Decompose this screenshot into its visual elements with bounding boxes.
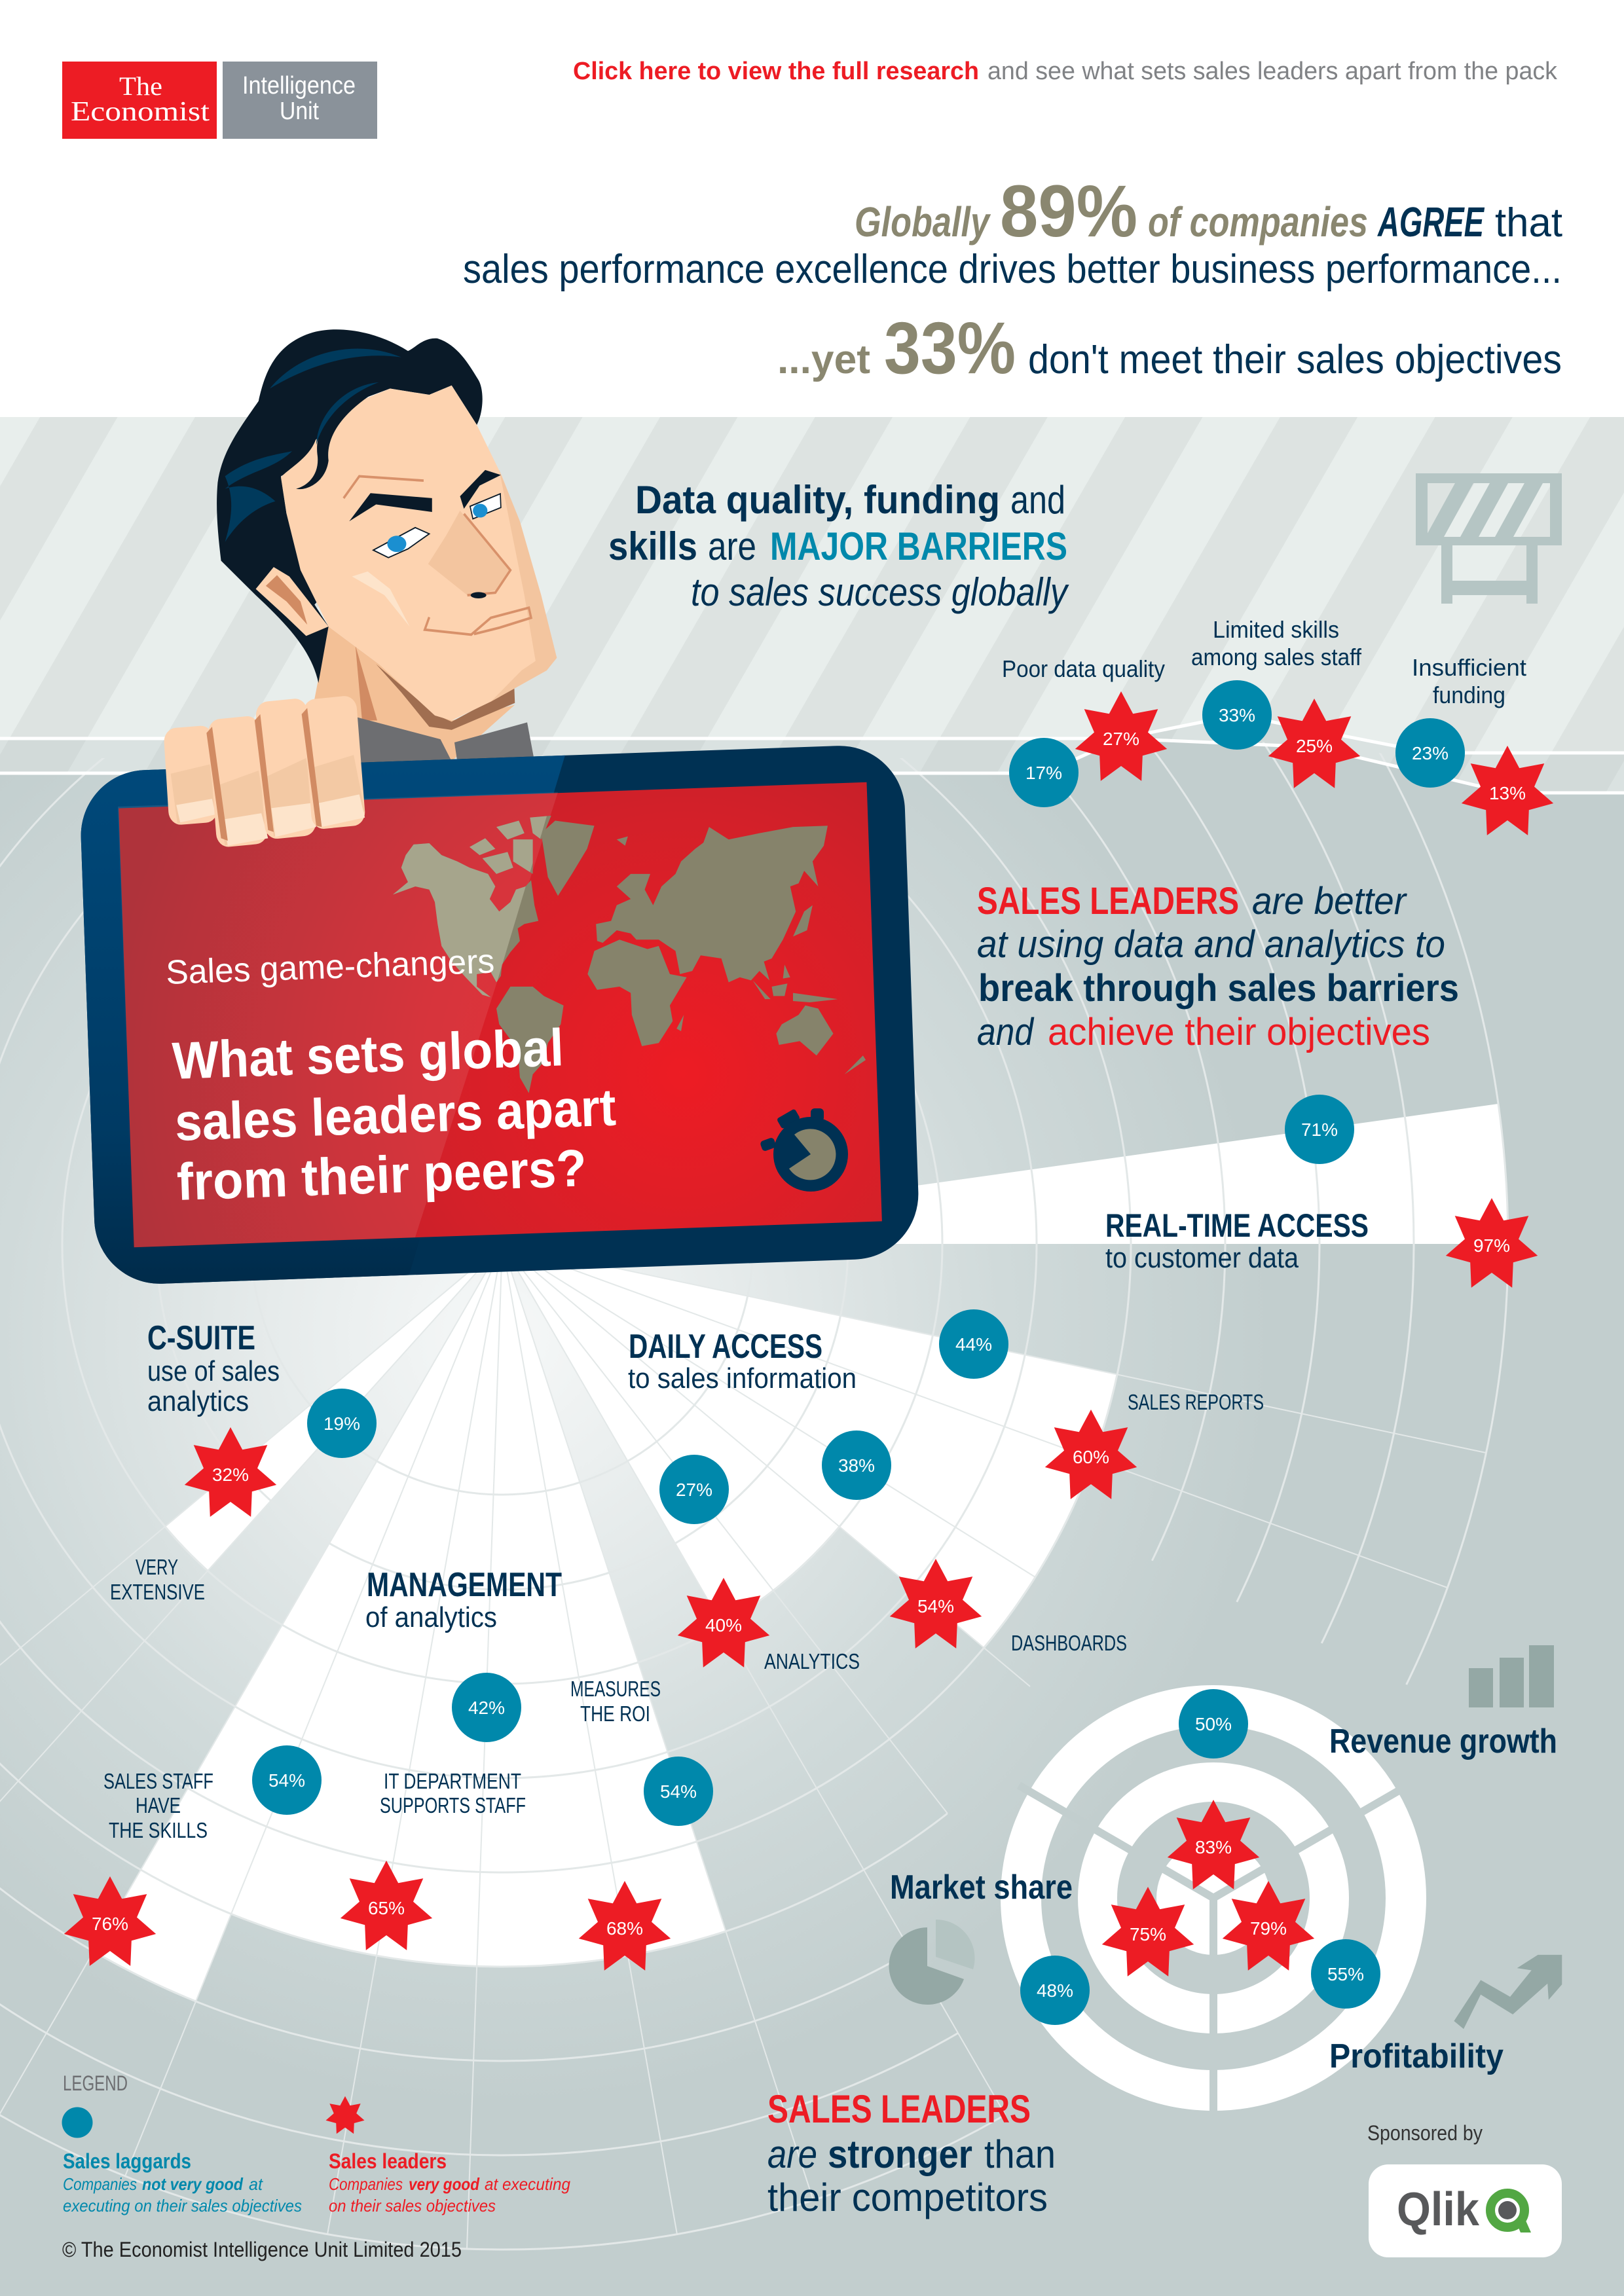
heading: daily access: to sales information (628, 1362, 857, 1394)
sales leaders statement: break through sales barriers (978, 967, 1459, 1010)
headline: 33% (884, 307, 1016, 389)
heading: c-suite: use of sales (147, 1355, 280, 1387)
star 83% (1168, 1800, 1259, 1889)
headline (463, 170, 1562, 389)
legend: sales leaders: Sales leaders (329, 2149, 447, 2173)
category labels: SALES REPORTS (1128, 1390, 1264, 1414)
barrier labels: among sales staff (1191, 644, 1362, 670)
logo: The Economist Intelligence Unit: Unit (280, 98, 319, 125)
finger 3 (255, 697, 317, 840)
category labels: THE ROI (580, 1702, 650, 1726)
neck (314, 627, 515, 761)
data values: 76% (92, 1914, 128, 1934)
donut chart: competitive strength (1019, 1689, 1408, 2116)
tablet title (171, 1018, 617, 1211)
legend: sales laggards: Sales laggards (63, 2149, 191, 2173)
legend: sales laggards (62, 2107, 302, 2215)
hair (217, 329, 483, 683)
data values: 23% (1412, 743, 1449, 763)
heading: management: MANAGEMENT (367, 1566, 562, 1604)
band between trend lines (0, 715, 1624, 793)
link line (573, 58, 1558, 85)
category labels (103, 1390, 1264, 1842)
hair highlights (225, 348, 401, 542)
bottom statement: SALES LEADERS (767, 2087, 1031, 2131)
data values: 27% (1103, 729, 1139, 749)
data values: 54% (917, 1596, 954, 1616)
legend: sales leaders: Companies (329, 2174, 403, 2194)
wedge: real-time access (502, 1104, 1508, 1244)
legend: sales laggards: at (249, 2174, 264, 2194)
logo: The Economist Intelligence Unit: The (119, 71, 162, 101)
inner disc (1156, 1841, 1270, 1955)
barriers heading: are (708, 524, 756, 568)
bottom statement: stronger (828, 2132, 972, 2176)
tablet frame (79, 744, 921, 1286)
data values: 68% (606, 1918, 643, 1939)
icon: stopwatch (760, 1108, 848, 1192)
category labels: IT DEPARTMENT (384, 1769, 521, 1793)
tablet title: sales leaders apart (174, 1078, 617, 1152)
wedge: sales staff (94, 1244, 502, 2001)
facial lines (344, 476, 531, 634)
data values: 44% (955, 1334, 992, 1355)
finger 4 (302, 695, 366, 830)
link line: Click here to view the full research (573, 58, 979, 85)
legend: sales leaders: very good (409, 2174, 480, 2194)
circle 55%: 55% (1327, 1964, 1364, 1984)
barrier labels: Poor data quality (1002, 655, 1165, 682)
wedge: sales reports and dashboards (502, 1244, 1117, 1648)
sponsor logo: Qlik: Qlik (1397, 2183, 1480, 2236)
category labels: HAVE (136, 1793, 181, 1817)
wedge: c-suite (165, 1244, 502, 1571)
headline: Globally (855, 198, 991, 246)
barrier labels (1002, 616, 1526, 708)
legend title: LEGEND (63, 2071, 128, 2095)
hair lock (296, 390, 379, 489)
label: market share: Market share (890, 1868, 1073, 1906)
heading: c-suite: analytics (147, 1385, 249, 1417)
legend (62, 2071, 570, 2215)
circle 50%: 50% (1195, 1714, 1232, 1734)
sales leaders statement: at using data and analytics to (977, 923, 1445, 966)
white sector wedges (94, 1104, 1508, 2001)
barriers heading: Data quality, funding (635, 478, 1000, 522)
legend: sales leaders (326, 2096, 570, 2215)
heading: real-time access (1105, 1207, 1369, 1274)
legend: sales leaders: on their sales objectives (329, 2196, 496, 2215)
data: sales leaders stars (64, 691, 1553, 1971)
data values: 42% (468, 1698, 505, 1718)
shirt collar (352, 716, 534, 771)
data values: 25% (1296, 736, 1333, 756)
sponsor label: Sponsored by (1367, 2121, 1483, 2145)
radial background panel (0, 738, 1624, 2296)
headline: AGREE (1377, 198, 1485, 246)
star 83%: 83% (1195, 1837, 1232, 1857)
logo: The Economist Intelligence Unit: Economist (71, 97, 210, 127)
star 75%: 75% (1130, 1924, 1166, 1944)
data values: 60% (1073, 1447, 1109, 1467)
circle 48% (1020, 1956, 1090, 2025)
sales leaders statement (977, 880, 1459, 1053)
wedge: management (141, 1244, 726, 1967)
data values: 17% (1025, 763, 1062, 783)
tablet title: from their peers? (175, 1139, 587, 1211)
legend: sales laggards: not very good (142, 2174, 244, 2194)
data values: 97% (1473, 1235, 1510, 1256)
category labels: THE SKILLS (109, 1818, 208, 1842)
copyright: © The Economist Intelligence Unit Limited 2015 (62, 2238, 462, 2261)
ear (256, 567, 329, 636)
barriers heading: and (1010, 478, 1065, 522)
star 75% (1102, 1887, 1194, 1977)
sales leaders statement: are better (1252, 880, 1408, 922)
headline: of companies (1148, 198, 1368, 246)
data values: 54% (660, 1781, 697, 1802)
legend: sales laggards: executing on their sales objectives (63, 2196, 302, 2215)
data values: 27% (676, 1480, 712, 1500)
illustration: man (217, 329, 557, 771)
data values: 32% (212, 1465, 249, 1485)
barrier labels: Limited skills (1213, 616, 1339, 643)
sales leaders statement: and (977, 1011, 1035, 1053)
sponsor logo: Qlik (1369, 2164, 1562, 2257)
headline: that (1495, 200, 1562, 246)
heading: management (365, 1566, 562, 1633)
heading: daily access (628, 1328, 857, 1394)
data values (92, 705, 1526, 1939)
heading: c-suite (147, 1319, 280, 1417)
logo: The Economist Intelligence Unit: Intelligence (242, 72, 356, 100)
category labels: SALES STAFF (103, 1769, 213, 1793)
world map (393, 816, 866, 1093)
data values: 38% (838, 1455, 875, 1476)
logo: The Economist Intelligence Unit (62, 62, 377, 139)
circle 48%: 48% (1037, 1980, 1073, 2001)
icon: pie chart (889, 1920, 975, 2005)
face (281, 386, 555, 720)
trend lines: barriers (0, 715, 1624, 793)
barriers heading (608, 478, 1069, 614)
barrier labels: Insufficient (1412, 654, 1526, 681)
sales leaders statement: achieve their objectives (1048, 1011, 1430, 1053)
category labels: MEASURES (570, 1677, 661, 1701)
tablet screen (119, 782, 882, 1247)
category labels: VERY (136, 1555, 178, 1579)
heading: real-time access: to customer data (1105, 1242, 1299, 1274)
tablet subtitle: Sales game-changers (165, 943, 495, 992)
legend: sales leaders: at executing (485, 2174, 570, 2194)
middle ring (1098, 1782, 1329, 2014)
circle 50% (1179, 1689, 1248, 1758)
eyebrows (349, 470, 501, 521)
tablet (65, 740, 921, 1296)
category labels: ANALYTICS (764, 1649, 860, 1673)
icon: road barrier (1416, 473, 1562, 604)
finger 2 (206, 715, 268, 848)
headline: 89% (1000, 170, 1137, 252)
finger 1 (163, 725, 219, 826)
data values: 19% (323, 1413, 360, 1434)
wedge: analytics (502, 1244, 840, 1625)
category labels: DASHBOARDS (1011, 1631, 1127, 1655)
heading: c-suite: C-SUITE (147, 1319, 255, 1357)
data values: 71% (1301, 1120, 1338, 1140)
barriers heading: to sales success globally (691, 570, 1069, 614)
data values: 54% (268, 1770, 305, 1791)
icon: bar chart (1469, 1645, 1554, 1707)
heading: real-time access: REAL-TIME ACCESS (1105, 1207, 1369, 1244)
star 79%: 79% (1250, 1918, 1287, 1939)
data values: 33% (1219, 705, 1255, 725)
barriers heading: MAJOR BARRIERS (770, 524, 1067, 568)
outer ring (1021, 1705, 1406, 2090)
star 79% (1223, 1881, 1314, 1971)
data: sales laggards circles (252, 680, 1465, 1826)
striped barrier band (0, 417, 1624, 810)
circle 55% (1311, 1939, 1380, 2009)
bottom statement: are (767, 2132, 817, 2176)
category labels: SUPPORTS STAFF (380, 1793, 526, 1817)
sales leaders statement: SALES LEADERS (977, 880, 1239, 922)
label: revenue growth: Revenue growth (1329, 1722, 1557, 1760)
link line: and see what sets sales leaders apart from the pack (987, 58, 1558, 85)
legend: sales laggards: Companies (63, 2174, 137, 2194)
tablet title: What sets global (171, 1018, 564, 1090)
bottom statement: than (984, 2132, 1056, 2176)
bottom statement: their competitors (767, 2176, 1048, 2219)
category labels: EXTENSIVE (110, 1580, 205, 1604)
barrier labels: funding (1433, 682, 1505, 708)
data values: 65% (368, 1898, 405, 1918)
heading: daily access: DAILY ACCESS (629, 1328, 822, 1366)
icon: rising arrow (1454, 1955, 1562, 2029)
data values: 40% (705, 1615, 742, 1635)
eyes (373, 528, 429, 558)
data values: 13% (1489, 783, 1526, 803)
label: profitability: Profitability (1329, 2037, 1504, 2075)
headline: don't meet their sales objectives (1028, 337, 1562, 382)
bottom statement (767, 2087, 1056, 2219)
heading: management: of analytics (365, 1601, 497, 1633)
barriers heading: skills (608, 524, 697, 568)
hand holding tablet (163, 695, 366, 848)
headline: ...yet (777, 337, 870, 382)
